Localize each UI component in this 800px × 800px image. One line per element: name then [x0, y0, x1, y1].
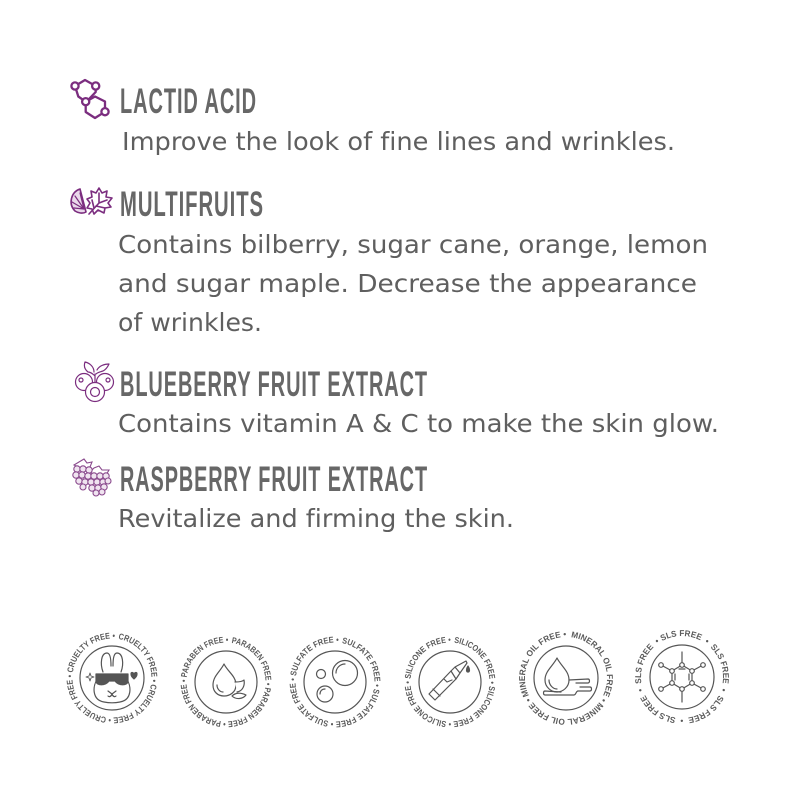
ingredient: blueberry fruit extract	[76, 362, 719, 438]
badge: paraben free: PARABEN FREE • PARABEN FREE • PARABEN FREE • PARABEN FREE •	[180, 636, 272, 728]
icon: rabbit with sunglasses	[86, 653, 137, 703]
ingredient: raspberry fruit extract	[73, 459, 514, 533]
description: multifruits: Contains bilberry, sugar cane, orange, lemon	[118, 230, 708, 259]
badge: mineral oil free: MINERAL OIL FREE • MINERAL OIL FREE • MINERAL OIL FREE •	[519, 632, 613, 725]
description: multifruits	[118, 230, 708, 337]
icon: drop and leaf	[213, 664, 246, 699]
heading: multifruits: MULTIFRUITS	[120, 185, 264, 224]
icon: molecule	[71, 80, 109, 118]
badge: cruelty free: CRUELTY FREE • CRUELTY FREE • CRUELTY FREE • CRUELTY FREE •	[66, 632, 158, 724]
description: multifruits: of wrinkles.	[118, 308, 262, 337]
badge: sulfate free: SULFATE FREE • SULFATE FREE • SULFATE FREE • SULFATE FREE •	[290, 636, 380, 728]
heading: lactid acid: LACTID ACID	[120, 82, 257, 121]
badge: sls free: SLS FREE • SLS FREE • SLS FREE • SLS FREE • SLS FREE •	[635, 630, 729, 724]
icon: bubbles	[316, 660, 358, 702]
icon: silicone tube	[429, 661, 470, 700]
description: lactid acid: Improve the look of fine lines and wrinkles.	[122, 127, 675, 156]
heading: raspberry fruit extract: RASPBERRY FRUIT EXTRACT	[120, 460, 428, 499]
icon: blueberries	[76, 362, 114, 402]
description: raspberry fruit extract: Revitalize and firming the skin.	[118, 504, 514, 533]
description: blueberry fruit extract: Contains vitamin A & C to make the skin glow.	[118, 409, 719, 438]
icon: raspberries	[73, 459, 111, 496]
icon: benzene molecule	[659, 652, 705, 702]
description: multifruits: and sugar maple. Decrease the appearance	[118, 269, 697, 298]
heading: blueberry fruit extract: BLUEBERRY FRUIT EXTRACT	[120, 365, 428, 404]
ingredient: multifruits	[71, 185, 708, 337]
icon: citrus slice and maple leaf	[71, 188, 112, 214]
badge: silicone free: SILICONE FREE • SILICONE FREE • SILICONE FREE • SILICONE FREE •	[404, 636, 496, 728]
ingredient: lactid acid	[71, 80, 675, 156]
icon: oil drop and spill	[544, 658, 592, 695]
